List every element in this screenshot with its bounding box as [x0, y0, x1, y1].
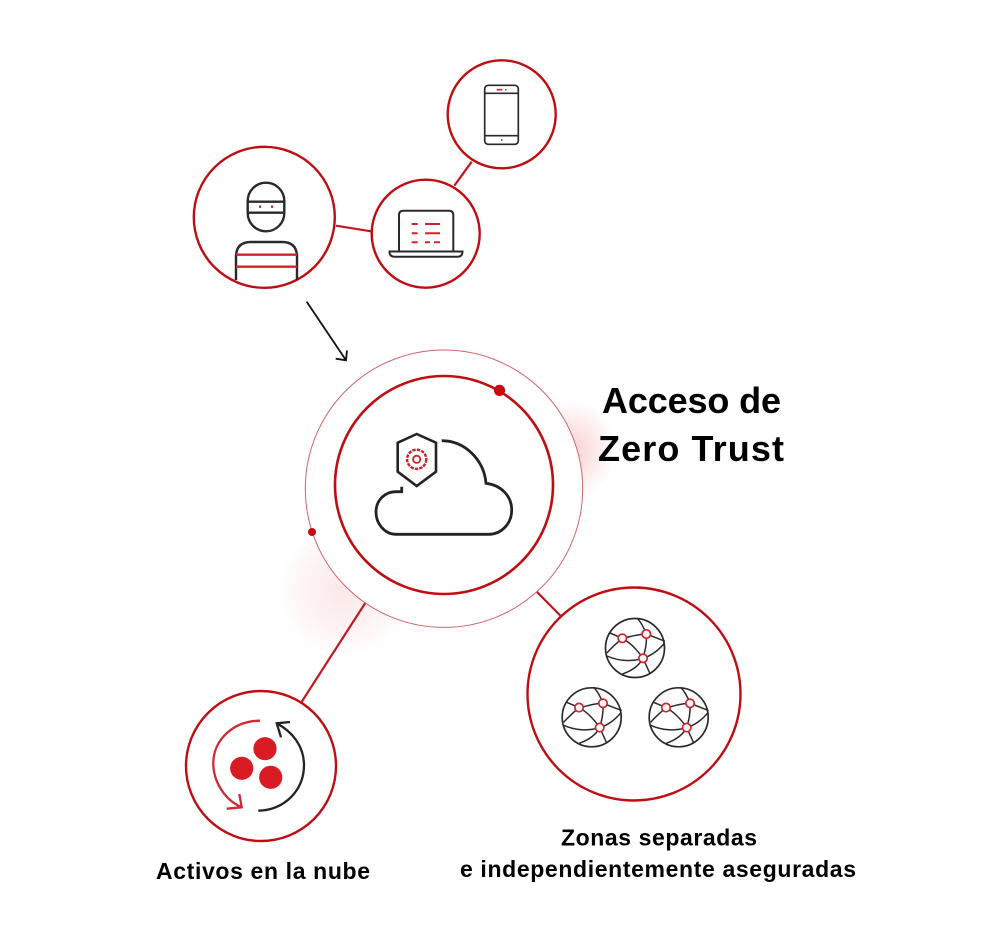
- dot: inner ring marker: [494, 385, 505, 396]
- glow: right of main ring: [528, 400, 616, 500]
- title line 2: Zero Trust: [598, 428, 784, 469]
- dot: outer ring marker: [308, 528, 316, 536]
- connector: main ring to zones: [514, 569, 561, 616]
- icon: cloud with shield: [376, 434, 512, 534]
- icon: globe right: [649, 687, 709, 747]
- glow: lower left of main ring: [277, 522, 413, 658]
- connector: main ring to cloud assets: [301, 602, 366, 703]
- icon: globe top: [606, 618, 665, 678]
- icon: masked person: [236, 183, 297, 280]
- panel: phone: [448, 60, 556, 168]
- icon: smartphone: [485, 85, 518, 144]
- label: zones line 1: Zonas separadas: [561, 824, 757, 850]
- icon: cycling assets: [213, 721, 304, 811]
- connector: laptop to phone: [454, 162, 472, 186]
- label: zones line 2: e independientemente aseguradas: [460, 856, 856, 882]
- connector: attacker to laptop: [336, 226, 371, 231]
- label: cloud assets: Activos en la nube: [156, 858, 370, 884]
- icon: globe left: [562, 687, 622, 747]
- panel: attacker: [194, 147, 335, 288]
- arrow: attacker toward main ring: [307, 302, 347, 360]
- panel: cloud assets: [186, 691, 336, 841]
- title: Acceso de: [602, 380, 781, 421]
- icon: laptop: [390, 211, 462, 257]
- panel: main Zero Trust ring: [305, 350, 583, 627]
- panel: separate zones: [528, 588, 740, 800]
- panel: laptop: [372, 180, 480, 288]
